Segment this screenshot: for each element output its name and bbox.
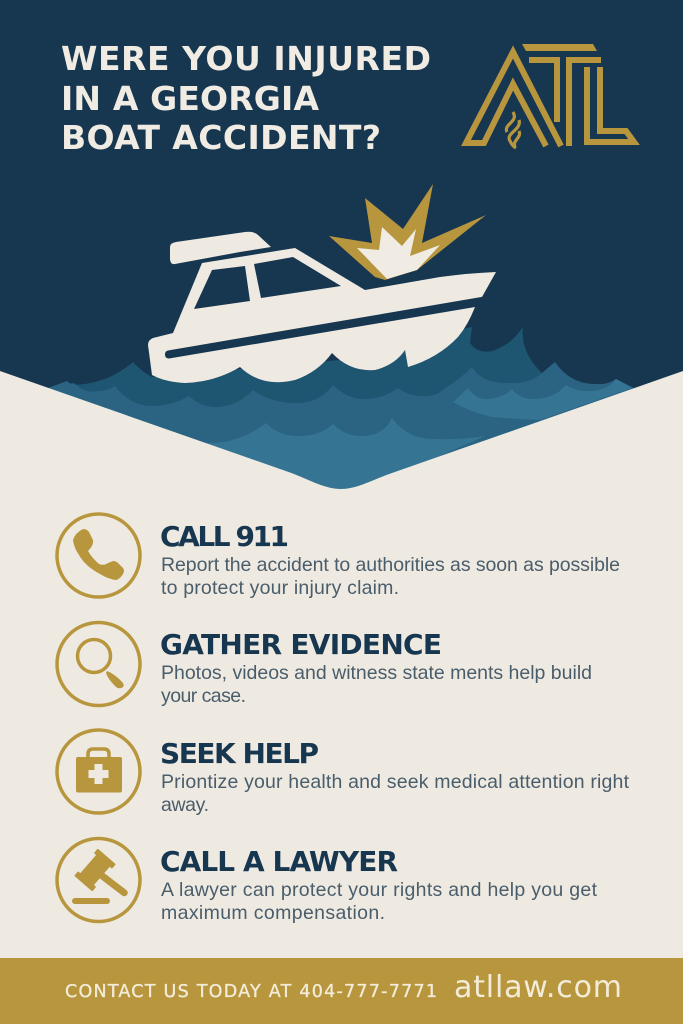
step 3: seek help	[57, 730, 630, 816]
text: gather evidence	[161, 662, 592, 707]
step 1: call 911	[57, 514, 620, 599]
title	[61, 39, 431, 157]
footer: website: atllaw.com	[454, 970, 622, 1005]
logo: ATL	[466, 44, 634, 148]
step 2: gather evidence	[57, 622, 592, 707]
text: seek help: Priontize your health and seek medical attention right	[161, 771, 630, 793]
text: gather evidence: your case.	[161, 685, 246, 707]
title: BOAT ACCIDENT?	[61, 118, 381, 157]
heading: gather evidence: GATHER EVIDENCE	[160, 628, 442, 661]
title: WERE YOU INJURED	[61, 39, 431, 78]
icon: magnifier	[57, 622, 140, 706]
heading: seek help: SEEK HELP	[160, 737, 319, 770]
illustration: boat	[148, 232, 496, 383]
panel: navy header background	[0, 0, 683, 500]
text: call a lawyer	[161, 879, 598, 924]
panel: cream lower background	[0, 371, 683, 1024]
text: gather evidence: Photos, videos and witness state ments help build	[161, 662, 592, 684]
heading: call 911: CALL 911	[160, 520, 289, 553]
footer band	[0, 958, 683, 1024]
text: seek help	[161, 771, 630, 816]
step 4: call a lawyer	[57, 838, 598, 924]
text: call a lawyer: maximum compensation.	[161, 902, 385, 924]
icon: phone	[57, 514, 140, 597]
title: IN A GEORGIA	[61, 79, 319, 118]
icon: gavel	[57, 838, 140, 922]
boat stripe	[165, 296, 490, 358]
text: call 911	[161, 554, 620, 599]
text: seek help: away.	[161, 794, 209, 816]
illustration: explosion burst	[329, 184, 486, 280]
footer: contact phone: CONTACT US TODAY AT 404-777-7771	[65, 982, 437, 1002]
waves	[48, 327, 634, 500]
heading: call a lawyer: CALL A LAWYER	[160, 845, 398, 878]
icon: medical kit	[57, 730, 140, 813]
text: call 911: Report the accident to authorities as soon as possible	[161, 554, 620, 576]
text: call 911: to protect your injury claim.	[161, 577, 399, 599]
text: call a lawyer: A lawyer can protect your rights and help you get	[161, 879, 598, 901]
